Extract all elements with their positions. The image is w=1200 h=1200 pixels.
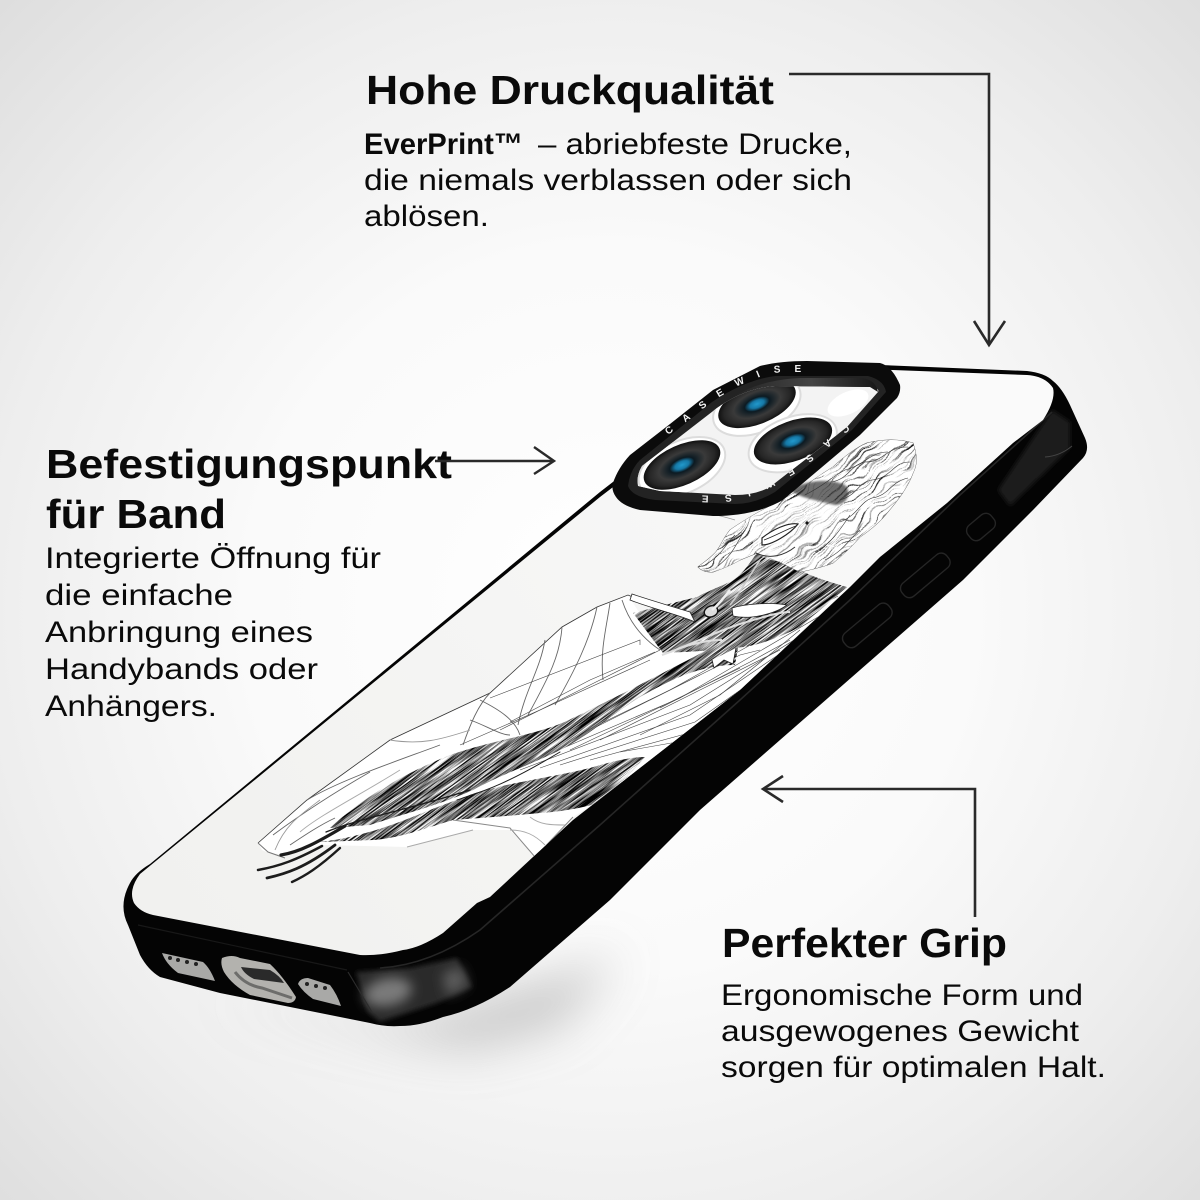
lens 3: [638, 436, 726, 493]
camera window: [638, 386, 878, 495]
volume down button: [842, 602, 893, 648]
body text: [364, 128, 852, 233]
window top rim: [726, 378, 878, 404]
garment hatch lines: [460, 596, 838, 770]
phone: [123, 361, 1088, 1026]
body text: die einfache: [45, 579, 233, 612]
body text: Handybands oder: [45, 653, 318, 686]
body text: Ergonomische Form und: [721, 979, 1083, 1012]
body text: EverPrint™: [364, 128, 523, 161]
bezel lettering top: CASEWISE: [665, 365, 801, 434]
volume up button: [900, 552, 951, 598]
arrow: top callout to phone: [789, 74, 1005, 345]
callout: Befestigungspunkt für Band: [45, 441, 452, 723]
heading: Hohe Druckqualität: [366, 67, 774, 113]
callout: Hohe Druckqualität: [364, 67, 852, 233]
heading: Perfekter Grip: [722, 920, 1007, 966]
body text: Anbringung eines: [45, 616, 313, 649]
bezel lettering bottom: CASEWISE: [702, 426, 849, 502]
face: [715, 481, 848, 561]
body text: Anhängers.: [45, 690, 217, 723]
camera module: [612, 361, 900, 516]
camera bezel: [612, 361, 900, 516]
body text: [721, 979, 1106, 1084]
charging port: [221, 956, 296, 1003]
lens 1: [712, 386, 802, 437]
arrow: strap attachment: [435, 447, 554, 474]
right speaker grille: [298, 978, 341, 1006]
heading: [46, 441, 452, 537]
phone case body: [123, 363, 1087, 1026]
arm and finger strokes: [258, 752, 560, 882]
hand and collar highlights: [630, 560, 790, 668]
heading: für Band: [46, 491, 226, 537]
corner highlight: [348, 958, 472, 1022]
side grooves: [380, 412, 1052, 968]
body text: [45, 542, 381, 723]
body text: – abriebfeste Drucke,: [538, 128, 852, 161]
lens 2: [748, 413, 838, 474]
hair: [698, 440, 917, 572]
hatched arms and chest: [320, 554, 847, 842]
arrow: grip: [763, 776, 975, 917]
body text: sorgen für optimalen Halt.: [721, 1051, 1106, 1084]
body text: die niemals verblassen oder sich: [364, 164, 852, 197]
shirt folds: [273, 600, 660, 850]
case side details: [138, 410, 1072, 1022]
illustration: figure: [256, 440, 917, 884]
action button: [966, 512, 996, 542]
back panel: [132, 368, 1054, 955]
hair strands: [705, 447, 910, 566]
body text: ausgewogenes Gewicht: [721, 1015, 1080, 1048]
body text: Integrierte Öffnung für: [45, 542, 381, 575]
upper side reflection: [998, 410, 1070, 506]
phone drop shadow: [215, 955, 620, 1048]
lenses: [638, 386, 838, 493]
heading: Befestigungspunkt: [46, 441, 452, 487]
bezel inner face: [628, 376, 886, 504]
flash: [823, 384, 873, 422]
callout: Perfekter Grip: [721, 920, 1106, 1084]
shirt: [258, 585, 850, 858]
left speaker grille: [162, 953, 215, 981]
body text: ablösen.: [364, 200, 489, 233]
